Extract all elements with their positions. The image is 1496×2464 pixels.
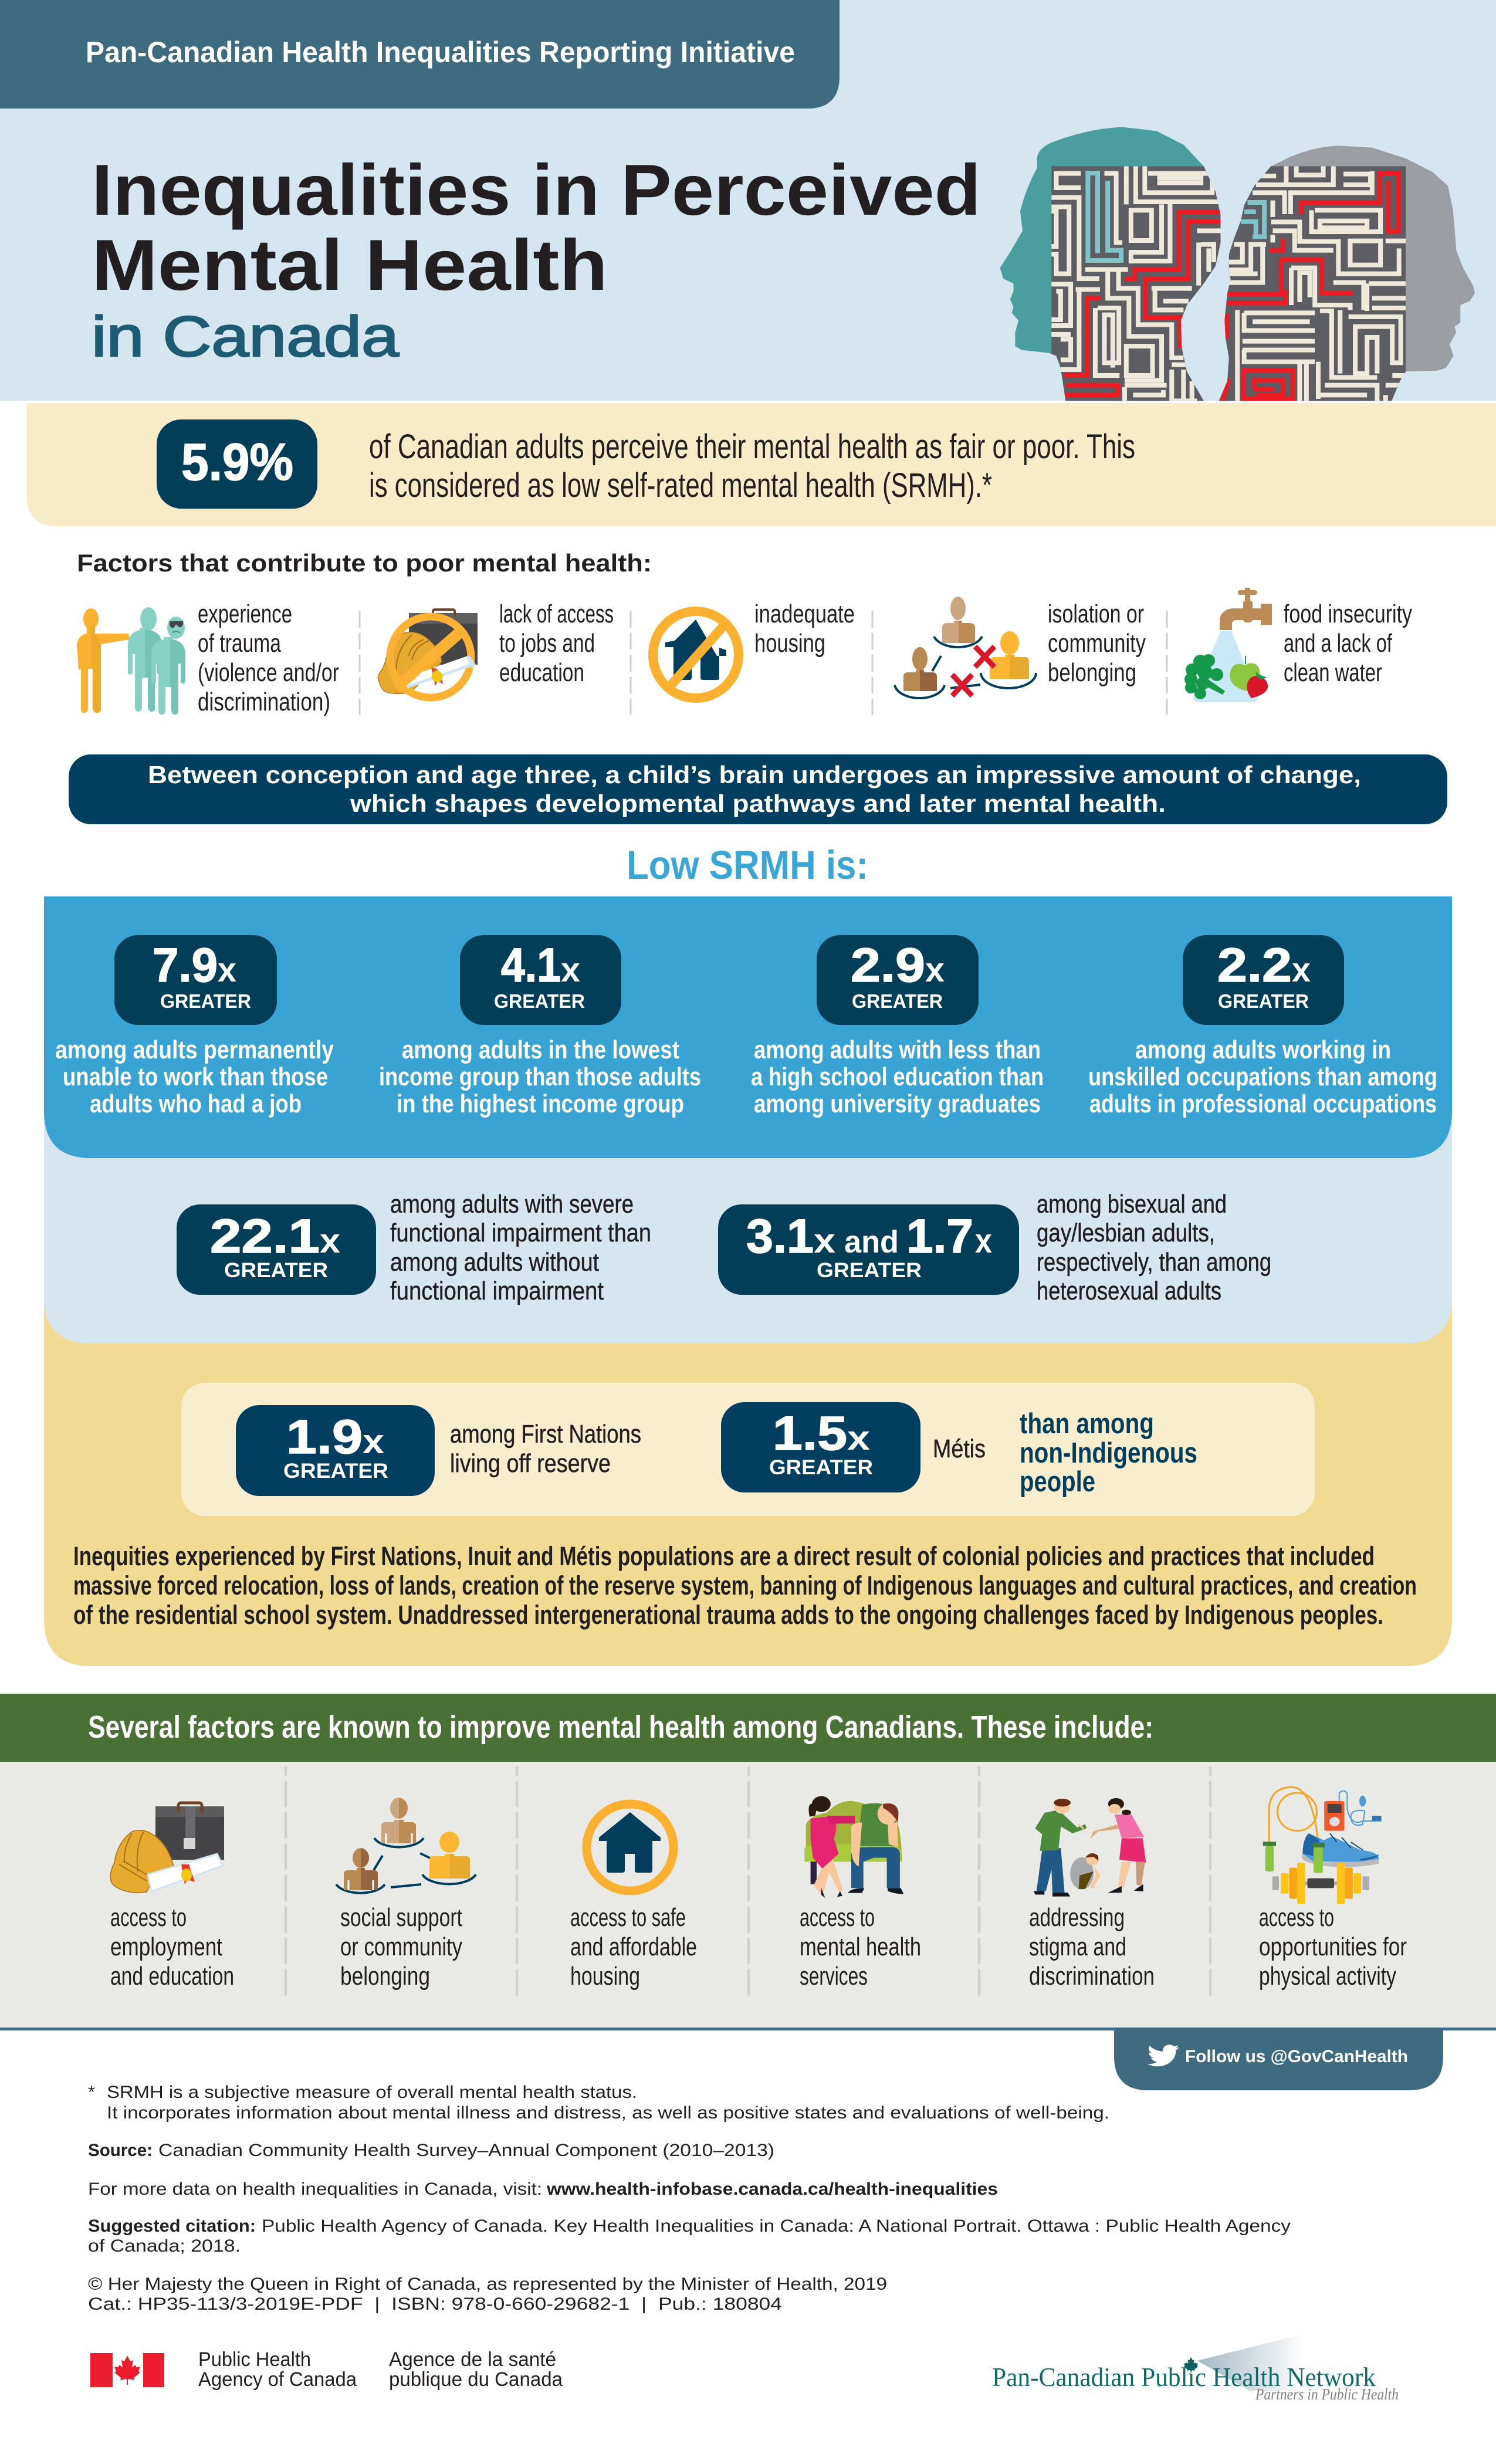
text: unskilled occupations <box>1088 1035 1437 1118</box>
heading: Low SRMH is: Low SRMH is: <box>627 842 868 888</box>
text: employment: and education <box>110 1962 234 1991</box>
stat pill 22.1x: GREATER <box>224 1259 328 1282</box>
text: Métis: Métis <box>933 1434 986 1463</box>
text: social support: belonging <box>340 1962 430 1991</box>
footnotes <box>88 2083 1291 2314</box>
callout text: is considered as low self-rated mental health (SRMH).* <box>369 466 992 505</box>
icon: two heads with maze <box>1000 127 1475 401</box>
text: inadequate housing: inadequate <box>754 600 855 628</box>
logo: Pan-Canadian Public Health Network <box>992 2334 1399 2403</box>
stat pill 3.1x and 1.7x: x <box>814 1222 835 1260</box>
stat 7.9x: GREATER <box>160 990 251 1012</box>
divider line under panel <box>0 2028 1496 2030</box>
stat pill 3.1x and 1.7x: 3.1 <box>746 1210 814 1263</box>
text: inadequate housing: housing <box>754 629 825 658</box>
text: agency names <box>198 2348 563 2391</box>
text: bisexual and gay/lesbian: respectively, than among <box>1037 1248 1271 1277</box>
text: lack of access: lack of access <box>499 600 614 628</box>
text: less than high school: a high school education than <box>751 1062 1044 1091</box>
text: physical activity: physical activity <box>1259 1962 1396 1991</box>
text: inequities paragraph <box>73 1541 1417 1630</box>
text: functional impairment <box>390 1190 651 1305</box>
footnotes: SRMH is a subjective measure of overall mental health status. <box>107 2083 637 2102</box>
stat pill 1.9x: GREATER <box>283 1460 388 1483</box>
footnotes: Source: <box>88 2141 153 2160</box>
initiative tab: Pan-Canadian Health Inequalities Reporting Initiative <box>86 36 795 69</box>
follow text: Follow us @GovCanHealth <box>1185 2047 1408 2066</box>
text: lowest income: in the highest income group <box>397 1089 684 1118</box>
title <box>92 150 981 368</box>
stat 4.1x <box>460 935 621 1025</box>
initiative tab <box>0 0 840 109</box>
text: isolation: community <box>1048 629 1146 658</box>
text: stigma: stigma and <box>1029 1932 1126 1961</box>
footnotes: Public Health Agency of Canada. Key Health Inequalities in Canada: A National Portrait. Ottawa : Public Health Agency <box>262 2216 1291 2236</box>
title: Mental Health <box>92 225 608 306</box>
text: lack of access <box>499 600 614 687</box>
text: than among non-Indigenous people: people <box>1020 1466 1095 1498</box>
text: employment: access to <box>110 1903 187 1932</box>
icon: social network <box>336 1798 476 1893</box>
text: employment: employment <box>110 1932 222 1961</box>
text: inadequate housing <box>754 600 855 658</box>
text: mental health services: mental health <box>800 1932 921 1961</box>
text: than among non-Indigenous people: non-Indigenous <box>1020 1437 1197 1469</box>
inner panel: Indigenous stats <box>181 1383 1315 1516</box>
green heading bar: Several factors are known to improve mental health among Canadians. These include: <box>88 1710 1153 1745</box>
footnotes: Suggested citation: <box>88 2216 256 2236</box>
stat 2.9x <box>817 935 979 1025</box>
text: stigma <box>1029 1903 1155 1991</box>
text: social support <box>340 1903 462 1991</box>
follow us tab <box>1114 2029 1443 2090</box>
text: food insecurity: and a lack of <box>1284 629 1393 658</box>
text: employment <box>110 1903 234 1991</box>
icon: twitter bird <box>1148 2045 1179 2066</box>
stat pill 3.1x and 1.7x <box>718 1204 1019 1295</box>
stat 4.1x: x <box>561 951 580 989</box>
text: experience of trauma: (violence and/or <box>198 658 339 687</box>
text: bisexual and gay/lesbian: gay/lesbian adults, <box>1037 1219 1215 1247</box>
text: agency names: Agency of Canada <box>198 2368 357 2391</box>
text: experience of trauma: discrimination) <box>198 688 330 716</box>
footnotes: Canadian Community Health Survey–Annual Component (2010–2013) <box>158 2141 774 2160</box>
text: functional impairment: functional impairment than <box>390 1219 651 1247</box>
stat pill 5.9% <box>157 419 317 509</box>
icon: isolation network <box>895 597 1036 698</box>
footnotes: It incorporates information about mental illness and distress, as well as positive states and evaluations of well-being. <box>107 2103 1109 2123</box>
text: isolation <box>1048 600 1146 687</box>
stat pill 3.1x and 1.7x: and <box>844 1224 899 1260</box>
footnotes: of Canada; 2018. <box>88 2236 241 2256</box>
text: safe housing: and affordable <box>570 1932 697 1961</box>
stat pill 1.5x <box>721 1402 920 1492</box>
panel: improving factors <box>0 1762 1496 2028</box>
text: stigma: discrimination <box>1029 1962 1155 1991</box>
text: stigma: addressing <box>1029 1903 1125 1932</box>
logo: Pan-Canadian Public Health Network: Partners in Public Health <box>1255 2385 1399 2403</box>
text: First Nations <box>450 1420 641 1478</box>
stat 4.1x: GREATER <box>494 990 585 1012</box>
text: bisexual and gay/lesbian: heterosexual adults <box>1037 1277 1221 1305</box>
icon: trauma people <box>77 607 185 715</box>
text: functional impairment: among adults without <box>390 1248 599 1277</box>
stat pill 1.9x <box>236 1405 435 1496</box>
icon: couple on couch <box>804 1796 903 1898</box>
stat pill 22.1x: x <box>320 1222 340 1260</box>
panel: yellow Indigenous <box>44 1232 1452 1666</box>
stat 7.9x: x <box>218 951 236 989</box>
text: First Nations: living off reserve <box>450 1449 611 1478</box>
banner: brain development: which shapes developmental pathways and later mental health. <box>350 790 1166 817</box>
text: bisexual and gay/lesbian <box>1037 1190 1271 1305</box>
text: experience of trauma: of trauma <box>198 629 281 658</box>
stat 2.2x: GREATER <box>1218 990 1309 1012</box>
stat 2.2x <box>1183 935 1344 1025</box>
banner: brain development: Between conception and age three, a child’s brain undergoes an impressive amount of change, <box>148 761 1361 788</box>
text: social support: or community <box>340 1932 462 1961</box>
factors row <box>77 588 1412 716</box>
text: functional impairment: among adults with severe <box>390 1190 634 1219</box>
stat pill 1.5x: x <box>847 1419 870 1457</box>
text: lack of access: to jobs and <box>499 629 595 658</box>
footnotes: Cat.: HP35-113/3-2019E-PDF | ISBN: 978-0-660-29682-1 | Pub.: 180804 <box>88 2294 782 2314</box>
text: agency names: Public Health <box>198 2348 311 2371</box>
icon: fitness equipment <box>1263 1787 1382 1904</box>
footnotes: www.health-infobase.canada.ca/health-inequalities <box>546 2179 998 2199</box>
panel: blue employment income education occupation <box>44 896 1452 1158</box>
text: mental health services: access to <box>800 1903 875 1932</box>
panel: light blue impairment and orientation <box>44 1115 1452 1343</box>
stat 2.9x: GREATER <box>852 990 943 1012</box>
text: food insecurity <box>1284 600 1412 687</box>
stat 2.9x: 2.9 <box>851 939 925 992</box>
footnotes: © Her Majesty the Queen in Right of Canada, as represented by the Minister of Health, 2019 <box>88 2275 887 2294</box>
text: than among non-Indigenous people <box>1020 1408 1197 1498</box>
text: food insecurity: clean water <box>1284 658 1382 687</box>
icon: briefcase helmet diploma <box>110 1803 224 1893</box>
text: less than high school: among adults with less than <box>754 1035 1041 1064</box>
callout: 5.9% band <box>26 403 1496 526</box>
text: safe housing: housing <box>570 1962 640 1991</box>
text: physical activity: access to <box>1259 1903 1334 1932</box>
text: unable to work: adults who had a job <box>90 1089 302 1118</box>
stat pill 5.9%: 5.9% <box>181 432 293 491</box>
text: First Nations: among First Nations <box>450 1420 641 1448</box>
stat 7.9x <box>114 935 277 1025</box>
stat pill 3.1x and 1.7x: GREATER <box>817 1259 922 1282</box>
text: functional impairment: functional impairment <box>390 1277 604 1305</box>
text: physical activity <box>1259 1903 1407 1991</box>
icon: no housing <box>653 611 739 698</box>
text: isolation: isolation or <box>1048 600 1144 628</box>
text: lowest income <box>379 1035 701 1118</box>
text: food insecurity: food insecurity <box>1284 600 1412 628</box>
text: bisexual and gay/lesbian: among bisexual and <box>1037 1190 1227 1219</box>
text: unable to work: unable to work than those <box>63 1062 328 1091</box>
text: safe housing: access to safe <box>570 1903 686 1932</box>
heading: factors: Factors that contribute to poor mental health: <box>77 549 652 577</box>
stat 2.9x: x <box>925 951 945 989</box>
callout text <box>369 428 1135 505</box>
stat pill 22.1x: 22.1 <box>210 1210 320 1263</box>
stat pill 1.5x: 1.5 <box>773 1407 847 1460</box>
stat 7.9x: 7.9 <box>153 939 218 992</box>
stat pill 1.9x: 1.9 <box>286 1410 363 1464</box>
text: unable to work: among adults permanently <box>55 1035 334 1064</box>
icon: no jobs or education <box>378 610 478 698</box>
text: unable to work <box>55 1035 334 1118</box>
text: experience of trauma: experience <box>198 600 292 628</box>
text: mental health services <box>800 1903 921 1991</box>
stat pill 3.1x and 1.7x: x <box>975 1222 992 1260</box>
logo: Canadian flag <box>90 2353 164 2387</box>
header panel <box>0 0 1496 401</box>
text: lowest income: among adults in the lowest <box>402 1035 679 1064</box>
icon: faucet and food <box>1184 588 1272 702</box>
text: physical activity: opportunities for <box>1259 1932 1407 1961</box>
callout text: of Canadian adults perceive their mental health as fair or poor. This <box>369 428 1135 466</box>
title: Inequalities in Perceived <box>92 150 981 231</box>
icon: stigma scene <box>1034 1798 1146 1897</box>
stat 4.1x: 4.1 <box>501 939 561 992</box>
footnotes: * <box>88 2083 95 2102</box>
footnotes: For more data on health inequalities in Canada, visit: <box>88 2179 542 2199</box>
stat pill 22.1x <box>177 1204 376 1295</box>
title: in Canada <box>92 304 399 368</box>
banner: brain development <box>69 754 1447 824</box>
text: agency names: Agence de la santé <box>389 2348 556 2371</box>
text: social support: social support <box>340 1903 462 1932</box>
logo: Pan-Canadian Public Health Network: Pan-Canadian Public Health Network <box>992 2362 1376 2392</box>
stat pill 1.9x: x <box>363 1423 384 1461</box>
text: agency names: publique du Canada <box>389 2368 563 2391</box>
text: mental health services: services <box>800 1962 868 1991</box>
text: lack of access: education <box>499 658 584 687</box>
stat pill 1.5x: GREATER <box>769 1456 873 1479</box>
text: less than high school: among university graduates <box>754 1089 1041 1118</box>
stat pill 3.1x and 1.7x: 1.7 <box>906 1210 973 1263</box>
green heading bar <box>0 1694 1496 1762</box>
text: than among non-Indigenous people: than among <box>1020 1408 1154 1440</box>
stat 2.2x: 2.2 <box>1217 939 1292 992</box>
stat 2.2x: x <box>1292 951 1311 989</box>
text: unskilled occupations: among adults working in <box>1135 1035 1391 1064</box>
icon: housing <box>587 1804 673 1891</box>
text: experience of trauma <box>198 600 339 716</box>
text: lowest income: income group than those adults <box>379 1062 701 1091</box>
text: safe housing <box>570 1903 697 1991</box>
text: isolation: belonging <box>1048 658 1136 687</box>
text: less than high school <box>751 1035 1044 1118</box>
